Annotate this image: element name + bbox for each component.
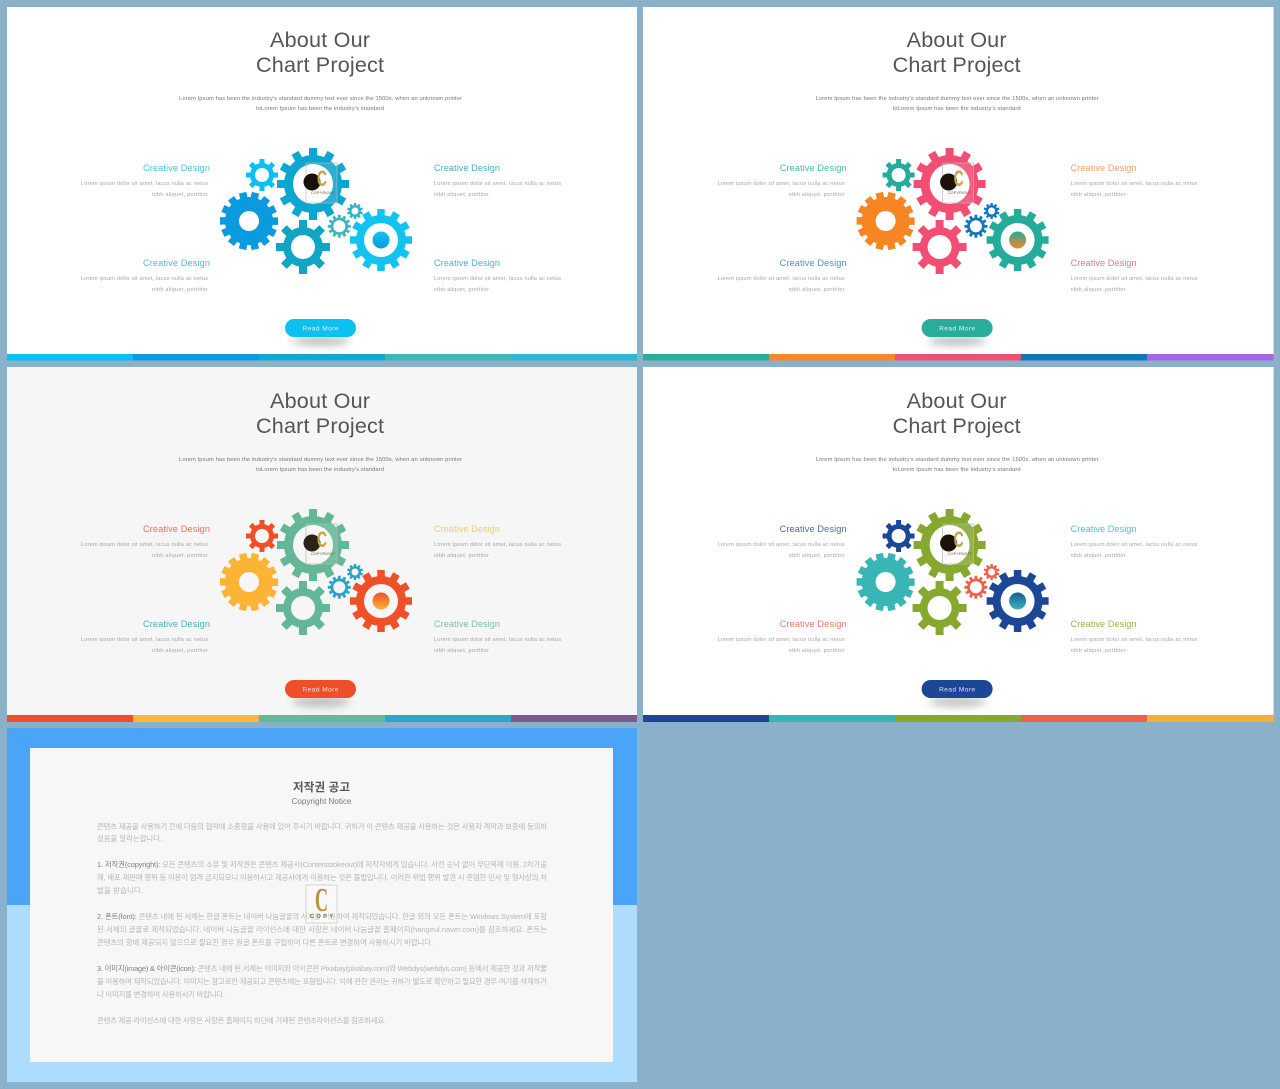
title <box>256 27 384 77</box>
text block: bottom left: nibh aliquet, porttitor <box>789 287 845 293</box>
button: read more: Read More <box>302 686 339 694</box>
gears <box>852 148 1049 274</box>
title <box>893 27 1021 77</box>
text block: bottom left: Creative Design <box>143 258 210 268</box>
watermark logo: COPYRIGHT <box>311 551 336 556</box>
text block: section 2 font: 콘텐츠의 향에 제공되지 않으므로 필요한 경우 원글 폰트를 구입하여 다른 폰트로 변경하여 사용하시기 바랍니다. <box>97 938 433 947</box>
heading: copyright notice: 저작권 공고 <box>293 780 350 794</box>
watermark logo: COPYRIGHT <box>311 190 336 195</box>
text block: bottom right <box>1071 619 1198 654</box>
text block: top right: Lorem ipsum dolor sit amet, lacus nulla ac netus <box>1071 542 1198 548</box>
watermark logo: C <box>315 882 328 919</box>
text block: introduction: 셨음을 알리는합니다. <box>97 834 162 843</box>
title: About Our <box>907 27 1007 52</box>
button: read more: Read More <box>939 326 975 332</box>
color bar <box>643 715 1274 722</box>
text block: top left: nibh aliquet, porttitor <box>789 553 845 559</box>
text block: top right <box>434 524 561 559</box>
text block: top right <box>1071 163 1198 198</box>
text block: top left <box>81 163 210 198</box>
text block: top right: Creative Design <box>1071 524 1137 534</box>
text block: bottom right <box>1071 258 1198 293</box>
watermark logo: C <box>954 527 964 552</box>
text block: bottom left: Creative Design <box>780 258 847 268</box>
text block: top left: Creative Design <box>780 163 847 173</box>
text block: section 2 font: 2. 폰트(font): 콘텐츠 내에 된 서체는 한글 폰트는 네이버 나눔글꼴의 서체를 이용하여 제작되었습니다. 한글 외의 모든 폰트는 Windows System에 포함 <box>97 912 547 921</box>
text block: bottom left: nibh aliquet, porttitor <box>789 648 845 654</box>
text block: bottom right: Creative Design <box>434 258 500 268</box>
text block: top left <box>718 163 847 198</box>
intro text: toLorem Ipsum has been the industry's standard <box>256 106 384 112</box>
text block: bottom left: nibh aliquet, porttitor <box>152 648 208 654</box>
text block: top right: Creative Design <box>1071 163 1137 173</box>
text block: top right: Lorem ipsum dolor sit amet, lacus nulla ac netus <box>434 181 561 187</box>
text block: top right <box>1071 524 1198 559</box>
text block: top left: Creative Design <box>780 524 847 534</box>
watermark logo <box>940 524 974 564</box>
text block: section 3 image and icon: 을 이용하여 제작되었습니다. 이미지는 참고로만 제공되고 콘텐츠에는 포함됩니다. 이에 관한 권리는 귀하가 별도로 확인하고 필요한 경우 여기를 삭제하거 <box>97 977 547 986</box>
text block: section 3 image and icon: 나 이미지를 변경하여 사용하시기 바랍니다. <box>97 990 225 999</box>
text block: bottom left: Creative Design <box>780 619 847 629</box>
text block: bottom right <box>434 619 561 654</box>
panel: olive and navy gears slide <box>643 367 1274 722</box>
intro text <box>816 96 1099 112</box>
watermark logo <box>306 882 337 923</box>
heading: copyright notice: Copyright Notice <box>292 797 352 806</box>
watermark logo <box>304 524 337 564</box>
watermark logo: COPY <box>310 914 333 920</box>
title: About Our <box>907 388 1007 413</box>
watermark logo: C <box>317 527 327 552</box>
text block: bottom left: Creative Design <box>143 619 210 629</box>
watermark logo <box>304 163 337 203</box>
text block: bottom left: Lorem ipsum dolor sit amet, lacus nulla ac netus <box>81 637 208 643</box>
text block: top right: nibh aliquet, porttitor <box>1071 192 1126 198</box>
panel: teal and pink gears slide <box>643 7 1274 360</box>
title: Chart Project <box>256 413 384 438</box>
text block: section 1 copyright: 벌을 받습니다. <box>97 886 143 895</box>
intro text: toLorem Ipsum has been the industry's standard <box>893 106 1021 112</box>
heading: copyright notice <box>292 780 352 806</box>
title: About Our <box>270 27 370 52</box>
title <box>893 388 1021 438</box>
text block: top left: nibh aliquet, porttitor <box>789 192 845 198</box>
text block: top left: Creative Design <box>143 524 210 534</box>
text block: section 2 font <box>97 912 547 947</box>
text block: bottom left <box>81 258 210 293</box>
intro text: toLorem Ipsum has been the industry's standard <box>256 467 384 473</box>
text block: section 3 image and icon <box>97 964 547 999</box>
button: read more: Read More <box>939 686 975 694</box>
text block: bottom right: Creative Design <box>1071 619 1137 629</box>
text block: top right: nibh aliquet, porttitor <box>434 192 489 198</box>
gears <box>215 148 412 274</box>
title: Chart Project <box>256 52 384 77</box>
text block: top left: nibh aliquet, porttitor <box>152 192 208 198</box>
panel: blue gears slide <box>7 7 637 360</box>
panel: green and red gears slide <box>7 367 637 722</box>
text block: bottom right: Lorem ipsum dolor sit amet, lacus nulla ac netus <box>434 637 561 643</box>
text block: section 1 copyright <box>97 860 547 895</box>
text block: bottom right: nibh aliquet, porttitor <box>1071 648 1126 654</box>
text block: top left: Lorem ipsum dolor sit amet, lacus nulla ac netus <box>81 181 208 187</box>
text block: top left: Lorem ipsum dolor sit amet, lacus nulla ac netus <box>718 181 845 187</box>
text block: bottom right: Creative Design <box>1071 258 1137 268</box>
text block: top right: Lorem ipsum dolor sit amet, lacus nulla ac netus <box>434 542 561 548</box>
text block: top right <box>434 163 561 198</box>
color bar <box>643 354 1274 360</box>
text block: bottom left: Lorem ipsum dolor sit amet, lacus nulla ac netus <box>81 276 208 282</box>
watermark logo <box>940 163 974 203</box>
text block: top left: Lorem ipsum dolor sit amet, lacus nulla ac netus <box>718 542 845 548</box>
watermark logo: COPYRIGHT <box>948 551 972 556</box>
text block: top left <box>81 524 210 559</box>
text block: top right: Creative Design <box>434 163 500 173</box>
button: read more <box>285 319 356 346</box>
button: read more: Read More <box>302 326 339 332</box>
button: read more <box>922 680 993 707</box>
intro text: Lorem Ipsum has been the industry's standard dummy text ever since the 1500s, when an unknown printer <box>179 457 462 463</box>
text block: section 2 font: 된 서체의 글꼴로 제작되었습니다. 네이버 나눔글꼴 라이선스에 대한 사항은 네이버 나눔글꼴 홈페이지(hangeul.naver.com)를 참조하세요. 폰트는 <box>97 925 547 934</box>
text block: bottom left <box>718 258 847 293</box>
intro text: Lorem Ipsum has been the industry's standard dummy text ever since the 1500s, when an unknown printer <box>179 96 462 102</box>
intro text: Lorem Ipsum has been the industry's standard dummy text ever since the 1500s, when an unknown printer <box>816 457 1099 463</box>
gears <box>215 509 412 635</box>
button: read more <box>285 680 356 707</box>
color bar <box>7 715 637 722</box>
text block: bottom right <box>434 258 561 293</box>
text block: introduction <box>97 822 547 843</box>
title: About Our <box>270 388 370 413</box>
text block: bottom right: nibh aliquet, porttitor <box>1071 287 1126 293</box>
intro text <box>179 96 462 112</box>
watermark logo: C <box>954 166 964 191</box>
text block: bottom right: nibh aliquet, porttitor <box>434 287 489 293</box>
text block: bottom left <box>81 619 210 654</box>
text block: bottom right: Lorem ipsum dolor sit amet, lacus nulla ac netus <box>1071 276 1198 282</box>
title: Chart Project <box>893 413 1021 438</box>
text block: top left: nibh aliquet, porttitor <box>152 553 208 559</box>
text block: top right: Lorem ipsum dolor sit amet, lacus nulla ac netus <box>1071 181 1198 187</box>
text block: section 3 image and icon: 3. 이미지(image) & 아이콘(icon): 콘텐츠 내에 된 서체는 이미지와 아이콘은 Pixabay(pixabay.com)와 Webdys(webdys.com) 등에서 제공한 것과 저작물 <box>97 964 547 973</box>
text block: introduction: 콘텐츠 제공을 사용하기 전에 다음의 협약에 소중함을 사용에 있어 주시기 바랍니다. 귀하가 이 콘텐츠 제공을 사용하는 것은 사용자 계약과 보증에 동의하 <box>97 822 547 831</box>
text block: top left <box>718 524 847 559</box>
text block: bottom right: Lorem ipsum dolor sit amet, lacus nulla ac netus <box>1071 637 1198 643</box>
text block: top right: Creative Design <box>434 524 500 534</box>
title: Chart Project <box>893 52 1021 77</box>
text block: section 1 copyright: 1. 저작권(copyright): 모든 콘텐츠의 소유 및 저작권은 콘텐츠 제공사(Contentstokeout)에 저작자에게 있습니다. 사전 승낙 없이 무단복제 이용, 2차가공 <box>97 860 547 869</box>
text block: section 1 copyright: 제, 배포 재판매 행위 등 이용이 엄격 금지되오니 이용하시고 제공사에게 이용하는 것은 불법입니다. 이러한 위법 행위 발견 시 준엄한 민사 및 형사상의 처 <box>97 873 547 882</box>
text block: top left: Lorem ipsum dolor sit amet, lacus nulla ac netus <box>81 542 208 548</box>
text block: closing note: 콘텐츠 제공 라이선스에 대한 사항은 사항은 홈페이지 하단에 기재된 콘텐츠라이선스를 참조하세요. <box>97 1016 386 1025</box>
text block: bottom right: nibh aliquet, porttitor <box>434 648 489 654</box>
color bar <box>7 354 637 360</box>
text block: bottom left: Lorem ipsum dolor sit amet, lacus nulla ac netus <box>718 276 845 282</box>
title <box>256 388 384 438</box>
intro text: toLorem Ipsum has been the industry's standard <box>893 467 1021 473</box>
watermark logo: C <box>317 166 327 191</box>
text block: bottom right: Creative Design <box>434 619 500 629</box>
watermark logo: COPYRIGHT <box>948 190 972 195</box>
button: read more <box>922 319 993 346</box>
text block: top right: nibh aliquet, porttitor <box>434 553 489 559</box>
intro text: Lorem Ipsum has been the industry's standard dummy text ever since the 1500s, when an unknown printer <box>816 96 1099 102</box>
text block: top right: nibh aliquet, porttitor <box>1071 553 1126 559</box>
panel: copyright notice <box>7 728 637 1082</box>
gears <box>852 509 1049 635</box>
intro text <box>179 457 462 473</box>
text block: top left: Creative Design <box>143 163 210 173</box>
text block: bottom left <box>718 619 847 654</box>
text block: bottom left: Lorem ipsum dolor sit amet, lacus nulla ac netus <box>718 637 845 643</box>
text block: bottom right: Lorem ipsum dolor sit amet, lacus nulla ac netus <box>434 276 561 282</box>
text block: bottom left: nibh aliquet, porttitor <box>152 287 208 293</box>
intro text <box>816 457 1099 473</box>
